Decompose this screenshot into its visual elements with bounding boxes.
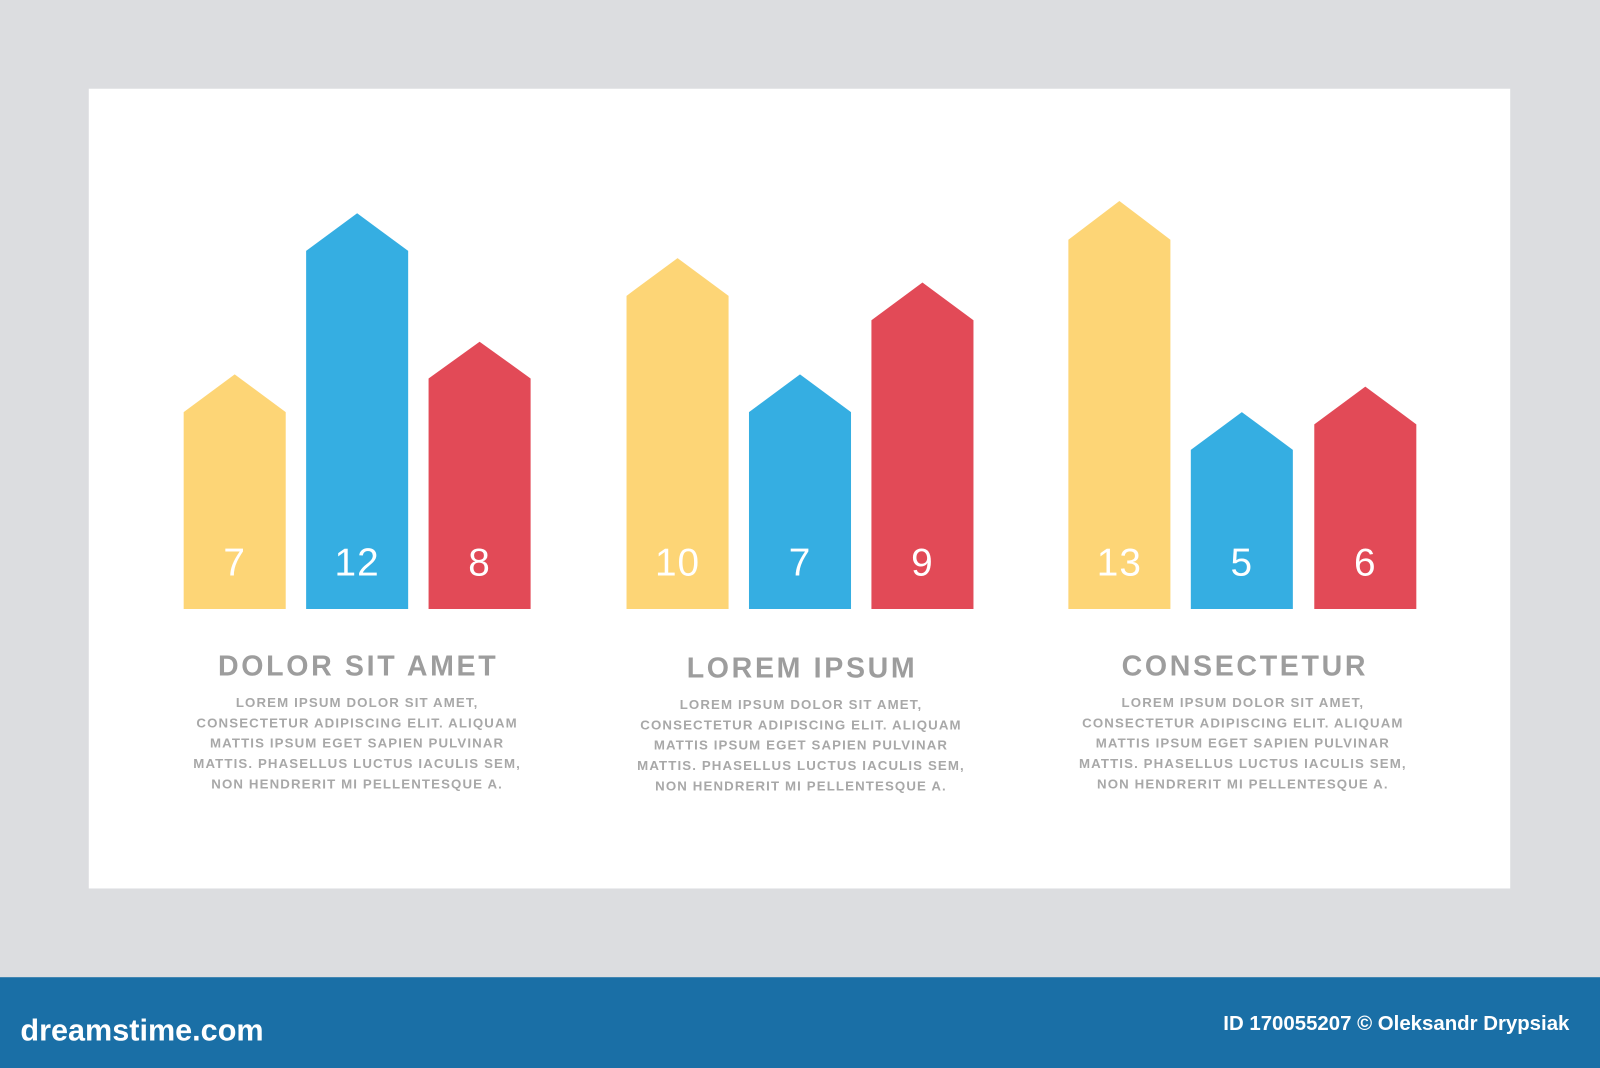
body 1: NON HENDRERIT MI PELLENTESQUE A. (211, 777, 503, 792)
footer bar (0, 977, 1600, 1068)
body 3: MATTIS. PHASELLUS LUCTUS IACULIS SEM, (1079, 756, 1407, 771)
bar: yellow 10 (627, 258, 729, 609)
body 3: MATTIS IPSUM EGET SAPIEN PULVINAR (1096, 736, 1390, 751)
bar: red 6: 6 (1354, 541, 1377, 584)
bar: blue 5: 5 (1231, 541, 1253, 584)
body 2: MATTIS. PHASELLUS LUCTUS IACULIS SEM, (637, 758, 965, 773)
bar: blue 12: 12 (335, 541, 380, 584)
body 1 (193, 695, 521, 792)
heading 2: LOREM IPSUM (687, 652, 917, 684)
body 1: CONSECTETUR ADIPISCING ELIT. ALIQUAM (196, 715, 518, 730)
body 1: MATTIS. PHASELLUS LUCTUS IACULIS SEM, (193, 756, 521, 771)
bar: yellow 7: 7 (223, 541, 246, 584)
body 2: NON HENDRERIT MI PELLENTESQUE A. (655, 779, 947, 794)
body 3: LOREM IPSUM DOLOR SIT AMET, (1122, 695, 1364, 710)
chart group 2 (627, 258, 973, 609)
body 1: LOREM IPSUM DOLOR SIT AMET, (236, 695, 478, 710)
bar: red 9 (871, 283, 973, 609)
text block 1 (193, 650, 521, 792)
white panel (89, 89, 1510, 888)
bar: red 8 (429, 342, 531, 609)
bar: blue 7: 7 (789, 541, 811, 584)
footer brand: dreamstime.com (20, 1013, 264, 1047)
bar: yellow 13 (1068, 201, 1170, 609)
bar: blue 7 (749, 374, 851, 609)
chart group 3 (1068, 201, 1416, 609)
bar: red 8: 8 (468, 541, 491, 584)
heading 3: CONSECTETUR (1122, 650, 1368, 682)
body 2: CONSECTETUR ADIPISCING ELIT. ALIQUAM (640, 717, 962, 732)
body 1: MATTIS IPSUM EGET SAPIEN PULVINAR (210, 736, 504, 751)
bar: blue 12 (306, 213, 408, 609)
body 3: CONSECTETUR ADIPISCING ELIT. ALIQUAM (1082, 715, 1404, 730)
text block 2 (637, 652, 965, 794)
body 3: NON HENDRERIT MI PELLENTESQUE A. (1097, 777, 1389, 792)
bar: yellow 7 (184, 374, 286, 609)
bar: yellow 10: 10 (655, 541, 700, 584)
bar: red 9: 9 (911, 541, 934, 584)
body 3 (1079, 695, 1407, 792)
chart group 1 (184, 213, 531, 609)
bar: yellow 13: 13 (1097, 541, 1142, 584)
body 2 (637, 697, 965, 794)
text block 3 (1079, 650, 1407, 792)
footer credit: ID 170055207 © Oleksandr Drypsiak (1223, 1013, 1570, 1035)
heading 1: DOLOR SIT AMET (218, 650, 498, 682)
body 2: LOREM IPSUM DOLOR SIT AMET, (680, 697, 922, 712)
bar: red 6 (1314, 387, 1416, 609)
body 2: MATTIS IPSUM EGET SAPIEN PULVINAR (654, 738, 948, 753)
bar: blue 5 (1191, 412, 1293, 609)
